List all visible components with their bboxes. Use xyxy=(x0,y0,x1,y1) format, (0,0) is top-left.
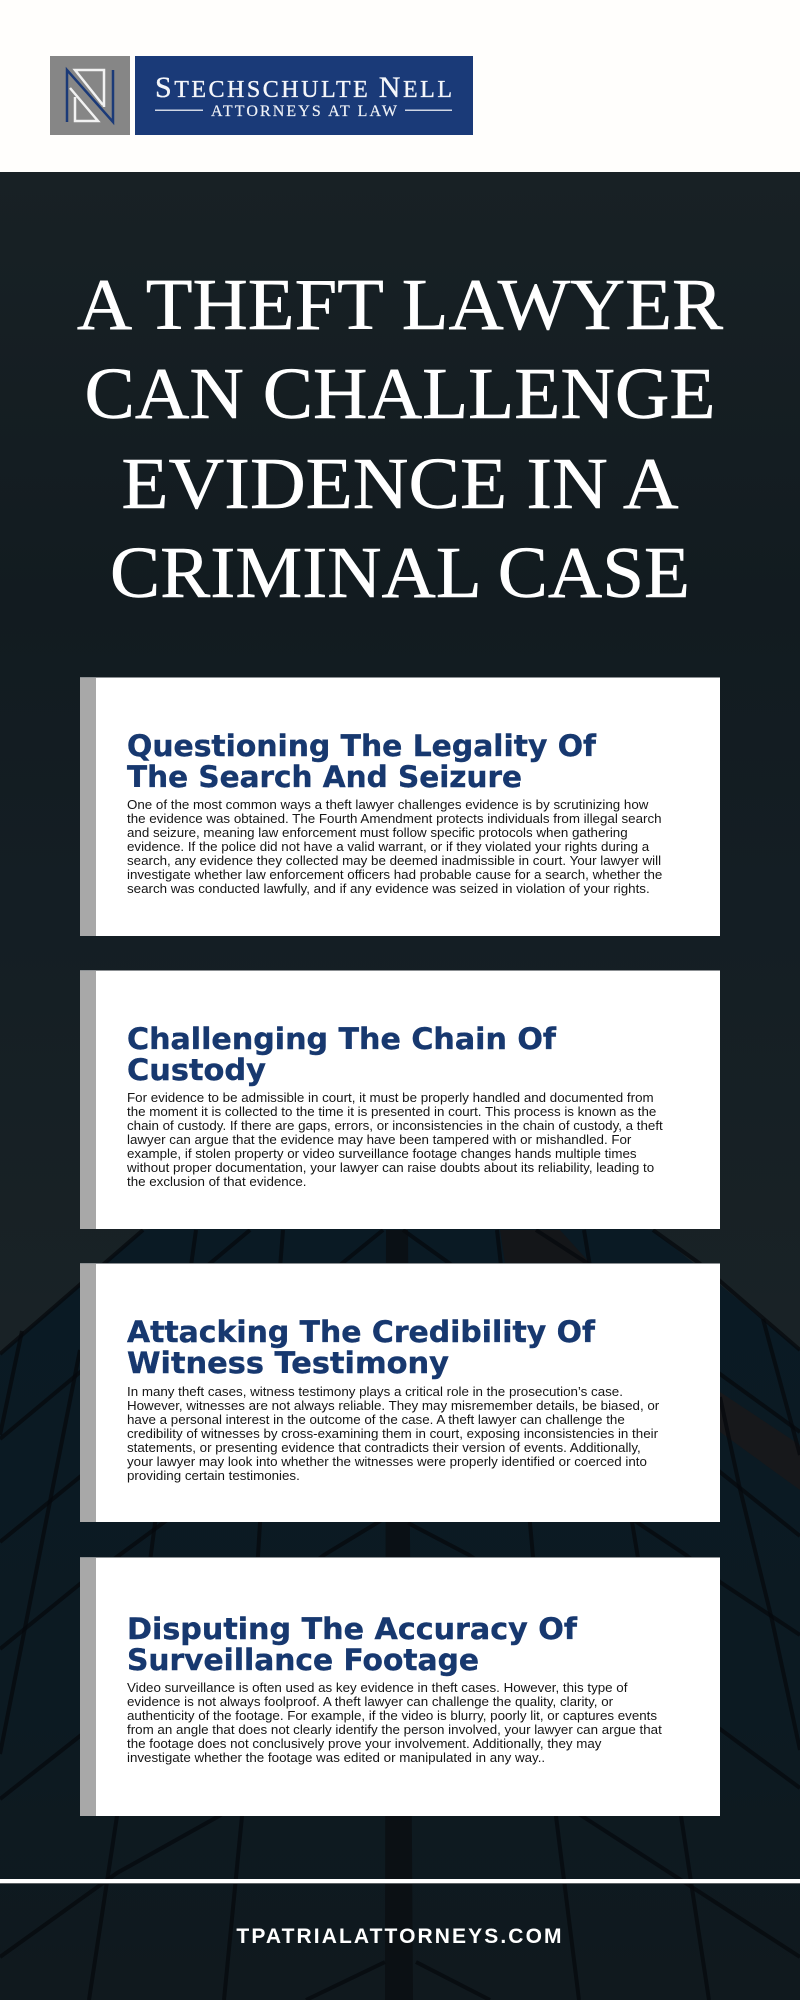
body text: investigate whether law enforcement officers had probable cause for a search, whether the xyxy=(127,867,662,882)
heading: Disputing The Accuracy Of xyxy=(127,1612,578,1646)
body text xyxy=(127,797,662,896)
heading: Witness Testimony xyxy=(127,1346,449,1380)
logo wordmark panel: ATTORNEYS AT LAW xyxy=(211,103,398,120)
logo wordmark panel: STECHSCHULTE NELL xyxy=(155,71,452,104)
title: A THEFT LAWYER xyxy=(77,264,723,345)
body text: providing certain testimonies. xyxy=(127,1468,300,1483)
body text: without proper documentation, your lawyer can raise doubts about its reliability, leading to xyxy=(127,1160,654,1175)
logo wordmark panel xyxy=(135,56,473,135)
heading: The Search And Seizure xyxy=(127,760,522,794)
icon: logo monogram xyxy=(50,56,130,135)
footer divider line xyxy=(0,1879,800,1884)
body text: the footage does not conclusively prove your involvement. Additionally, they may xyxy=(127,1736,601,1751)
body text: search, any evidence they collected may be deemed inadmissible in court. Your lawyer will xyxy=(127,853,661,868)
body text: your lawyer may look into whether the witnesses were properly identified or coerced into xyxy=(127,1454,647,1469)
title: EVIDENCE IN A xyxy=(121,443,679,524)
title: CRIMINAL CASE xyxy=(110,532,690,613)
body text: the exclusion of that evidence. xyxy=(127,1174,307,1189)
body text: Video surveillance is often used as key evidence in theft cases. However, this type of xyxy=(127,1680,627,1695)
panel: questioning the search and seizure xyxy=(80,677,720,936)
body text: authenticity of the footage. For example, if the video is blurry, poorly lit, or captures events xyxy=(127,1708,657,1723)
title xyxy=(77,264,724,613)
heading xyxy=(127,1022,557,1087)
heading: Challenging The Chain Of xyxy=(127,1022,557,1056)
body text: the evidence was obtained. The Fourth Amendment protects individuals from illegal search xyxy=(127,811,662,826)
body text: credibility of witnesses by cross-examining them in court, exposing inconsistencies in their xyxy=(127,1426,658,1441)
panel: disputing surveillance footage xyxy=(80,1557,720,1816)
body text: investigate whether the footage was edited or manipulated in any way.. xyxy=(127,1750,545,1765)
body text: example, if stolen property or video surveillance footage changes hands multiple times xyxy=(127,1146,637,1161)
heading: Surveillance Footage xyxy=(127,1643,479,1677)
body text: evidence is not always foolproof. A theft lawyer can challenge the quality, clarity, or xyxy=(127,1694,613,1709)
panel: challenging the chain of custody xyxy=(80,970,720,1229)
body text: evidence. If the police did not have a valid warrant, or if they violated your rights during a xyxy=(127,839,649,854)
body text: However, witnesses are not always reliable. They may misremember details, be biased, or xyxy=(127,1398,659,1413)
body text: One of the most common ways a theft lawyer challenges evidence is by scrutinizing how xyxy=(127,797,648,812)
body text: lawyer can argue that the evidence may have been tampered with or mishandled. For xyxy=(127,1132,631,1147)
body text: from an angle that does not clearly identify the person involved, your lawyer can argue that xyxy=(127,1722,662,1737)
panel: attacking witness testimony xyxy=(80,1263,720,1522)
heading xyxy=(127,1612,578,1677)
body text: For evidence to be admissible in court, it must be properly handled and documented from xyxy=(127,1090,654,1105)
heading: Custody xyxy=(127,1053,266,1087)
body text xyxy=(127,1384,659,1483)
heading: Questioning The Legality Of xyxy=(127,729,597,763)
body text xyxy=(127,1680,662,1765)
body text: search was conducted lawfully, and if any evidence was seized in violation of your rights. xyxy=(127,881,650,896)
body text: statements, or presenting evidence that contradicts their version of events. Additionally, xyxy=(127,1440,641,1455)
body text xyxy=(127,1090,663,1189)
body text: chain of custody. If there are gaps, errors, or inconsistencies in the chain of custody, a theft xyxy=(127,1118,663,1133)
title: CAN CHALLENGE xyxy=(84,353,716,434)
heading xyxy=(126,1315,596,1380)
body text: the moment it is collected to the time it is presented in court. This process is known as the xyxy=(127,1104,656,1119)
heading: Attacking The Credibility Of xyxy=(127,1315,596,1349)
header band xyxy=(0,0,800,172)
body text: In many theft cases, witness testimony plays a critical role in the prosecution’s case. xyxy=(127,1384,623,1399)
logo xyxy=(50,56,473,135)
body text: have a personal interest in the outcome of the case. A theft lawyer can challenge the xyxy=(127,1412,625,1427)
body text: and seizure, meaning law enforcement must follow specific protocols when gathering xyxy=(127,825,628,840)
heading xyxy=(126,729,597,794)
footer website: TPATRIALATTORNEYS.COM xyxy=(236,1925,564,1948)
